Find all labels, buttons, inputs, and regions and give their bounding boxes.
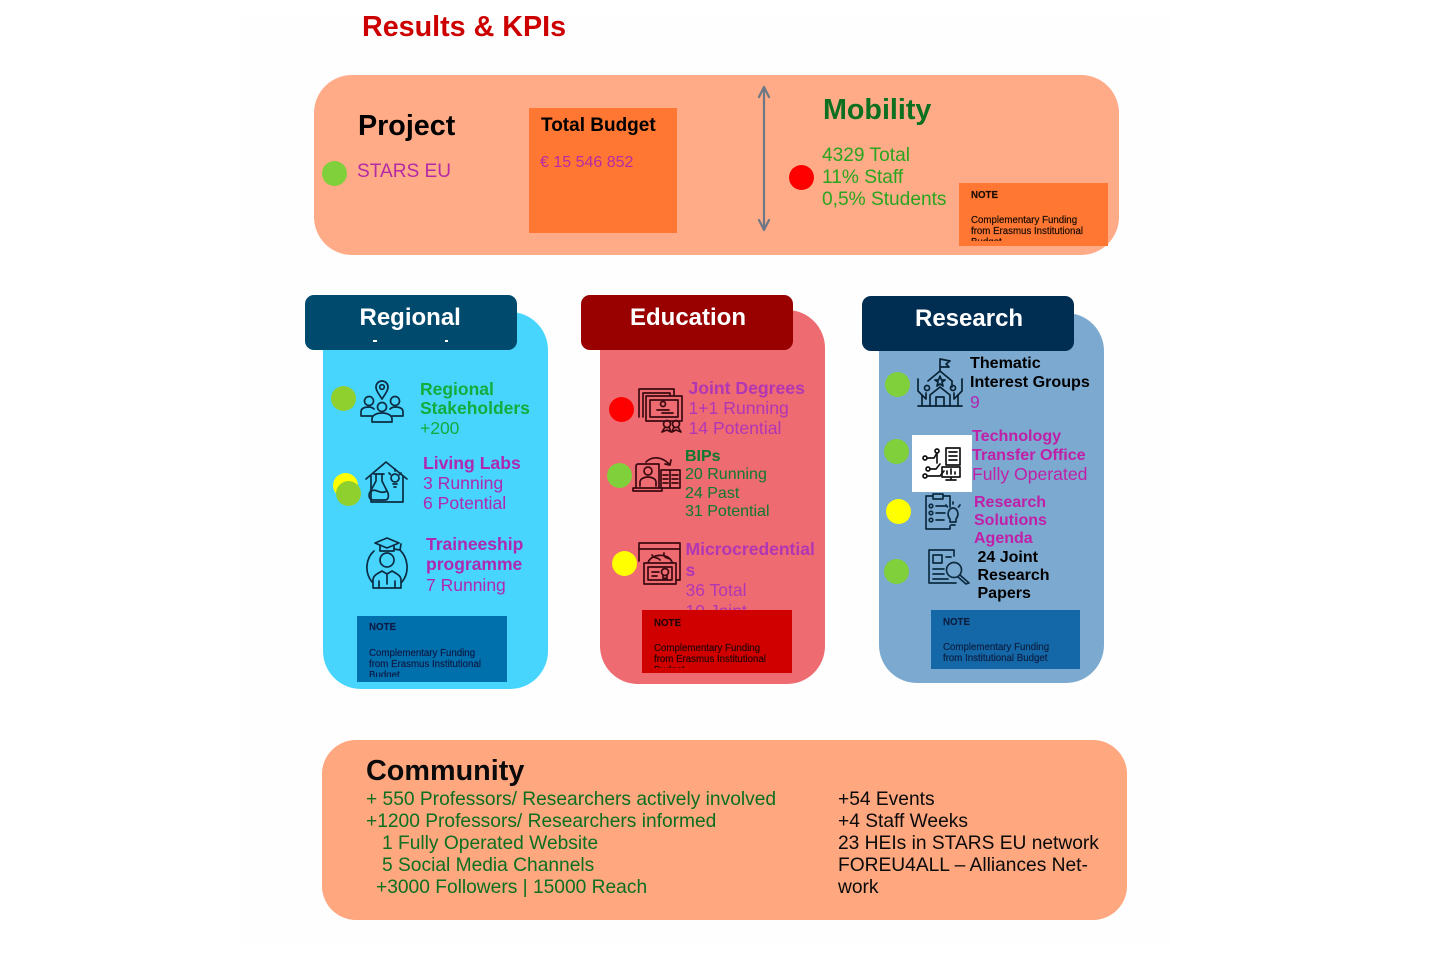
icon: joint degrees: [638, 388, 683, 433]
status dot: project: [322, 161, 347, 186]
status dot: thematic groups: [885, 372, 910, 397]
mobility figures: 4329 Total: [822, 145, 910, 166]
community figures: people and reach: +3000 Followers | 15000 Reach: [376, 877, 647, 898]
note: education funding: [642, 610, 792, 673]
status dot: bips: [607, 463, 632, 488]
icon: technology transfer: [912, 435, 972, 492]
arrow: double-headed vertical: [758, 86, 770, 232]
heading: research: Research: [915, 305, 1023, 332]
text: joint papers: 24 Joint: [978, 549, 1038, 566]
icon: joint papers: [928, 549, 970, 585]
mobility figures: 0,5% Students: [822, 189, 946, 210]
note: regional funding: Complementary Funding: [369, 648, 475, 659]
note: education funding: Complementary Funding: [654, 643, 760, 654]
heading: research: [862, 296, 1074, 351]
text: living labs: [423, 453, 521, 513]
icon: stakeholders: [360, 380, 404, 423]
text: bips: BIPs: [685, 448, 721, 464]
budget heading: Total Budget: [541, 115, 656, 136]
text: bips: 24 Past: [685, 484, 739, 502]
text: stakeholders: [420, 378, 530, 438]
status dot: microcredentials: [612, 551, 637, 576]
text: solutions agenda: Agenda: [974, 530, 1033, 547]
text: technology transfer: Technology: [972, 427, 1061, 445]
panel: community: [322, 740, 1127, 920]
text: living labs: Living Labs: [423, 453, 521, 473]
text: joint degrees: [688, 378, 805, 438]
community figures: people and reach: +1200 Professors/ Researchers informed: [366, 811, 716, 832]
text: microcredentials: 36 Total: [686, 580, 746, 600]
text: stakeholders: Stakeholders: [420, 398, 530, 418]
community figures: events and network: 23 HEIs in STARS EU network: [838, 833, 1099, 854]
text: microcredentials: 10 Joint: [686, 601, 747, 621]
text: traineeship: programme: [426, 554, 522, 574]
card background: [879, 313, 1104, 683]
status dot: stakeholders: [331, 386, 356, 411]
text: stakeholders: Regional: [420, 378, 494, 398]
community figures: people and reach: + 550 Professors/ Researchers actively involved: [366, 788, 776, 810]
note: mobility funding: Complementary Funding: [971, 215, 1077, 226]
text: traineeship: Traineeship: [426, 534, 523, 554]
text: joint degrees: Joint Degrees: [688, 378, 805, 398]
icon: bips: [632, 457, 681, 492]
note: mobility funding: NOTE: [971, 190, 998, 201]
heading: education: Education: [630, 304, 746, 330]
community figures: people and reach: 5 Social Media Channels: [382, 855, 594, 876]
text: technology transfer: Fully Operated: [972, 464, 1087, 484]
text: joint papers: [978, 549, 1050, 602]
panel: research: [862, 296, 1104, 683]
status dot: technology transfer: [884, 439, 909, 464]
text: thematic groups: 9: [970, 392, 980, 412]
icon: solutions agenda: [925, 493, 961, 530]
note: research funding: from Institutional Budget: [943, 653, 1047, 664]
panel: project and mobility: [314, 75, 1119, 255]
total budget box: [529, 108, 677, 233]
text: solutions agenda: Research: [974, 494, 1046, 511]
text: thematic groups: Thematic: [970, 354, 1041, 372]
text: bips: 31 Potential: [685, 503, 770, 520]
text: bips: [685, 448, 770, 520]
note: regional funding: [357, 616, 507, 682]
heading: regional: Regional: [360, 304, 461, 331]
project name: STARS EU: [357, 161, 451, 182]
text: solutions agenda: [974, 494, 1047, 547]
text: traineeship: [426, 534, 523, 595]
status dot: solutions agenda: [886, 499, 911, 524]
community figures: events and network: [838, 788, 1099, 898]
panel: regional: [305, 295, 548, 689]
text: joint papers: Papers: [978, 585, 1031, 602]
text: thematic groups: Interest Groups: [970, 373, 1090, 391]
note: education funding: NOTE: [654, 618, 681, 628]
note: mobility funding: [959, 183, 1108, 246]
text: thematic groups: [970, 354, 1090, 412]
icon: microcredentials: [638, 542, 681, 585]
community figures: events and network: +4 Staff Weeks: [838, 811, 968, 832]
note: research funding: [931, 610, 1080, 669]
heading: project: Project: [358, 110, 455, 142]
text: bips: 20 Running: [685, 466, 767, 483]
text: technology transfer: Transfer Office: [972, 446, 1086, 464]
card background: [600, 310, 825, 684]
note: mobility funding: from Erasmus Institutional: [971, 226, 1083, 237]
panel: education: [581, 295, 825, 684]
community figures: people and reach: [366, 788, 776, 898]
heading: community: Community: [366, 755, 524, 787]
status dots: living labs: [333, 473, 361, 506]
title: Results & KPIs: [362, 11, 566, 43]
text: microcredentials: s: [686, 560, 695, 580]
text: joint papers: Research: [978, 567, 1050, 584]
community figures: events and network: FOREU4ALL – Alliances Net-: [838, 855, 1088, 876]
community figures: events and network: +54 Events: [838, 788, 935, 810]
note: regional funding: from Erasmus Institutional: [369, 659, 481, 670]
icon: living labs: [365, 461, 408, 503]
text: traineeship: 7 Running: [426, 575, 506, 595]
text: microcredentials: [686, 539, 815, 621]
community figures: events and network: work: [838, 877, 879, 898]
card background: [323, 312, 548, 689]
text: stakeholders: +200: [420, 418, 459, 438]
note: research funding: NOTE: [943, 617, 970, 628]
budget value: € 15 546 852: [540, 154, 633, 171]
text: solutions agenda: Solutions: [974, 512, 1047, 529]
text: microcredentials: Microcredential: [686, 539, 815, 559]
note: regional funding: NOTE: [369, 622, 396, 633]
text: joint degrees: 1+1 Running: [688, 398, 789, 418]
status dot: joint degrees: [609, 397, 634, 422]
text: joint degrees: 14 Potential: [688, 418, 781, 438]
text: living labs: 3 Running: [423, 473, 503, 493]
text: living labs: 6 Potential: [423, 493, 506, 513]
heading: regional: [304, 295, 516, 350]
icon: traineeship: [366, 537, 408, 589]
community figures: people and reach: 1 Fully Operated Website: [382, 833, 598, 854]
note: education funding: from Erasmus Institutional: [654, 654, 766, 665]
note: research funding: Complementary Funding: [943, 642, 1049, 653]
status dot: joint papers: [884, 559, 908, 584]
mobility figures: [822, 145, 946, 210]
heading: education: [581, 295, 793, 350]
mobility figures: 11% Staff: [822, 167, 903, 188]
status dot: mobility: [788, 165, 814, 190]
faint page backdrop: [240, 14, 1170, 946]
text: technology transfer: [972, 427, 1087, 484]
heading: mobility: Mobility: [823, 94, 931, 126]
icon: thematic groups: [917, 358, 963, 407]
